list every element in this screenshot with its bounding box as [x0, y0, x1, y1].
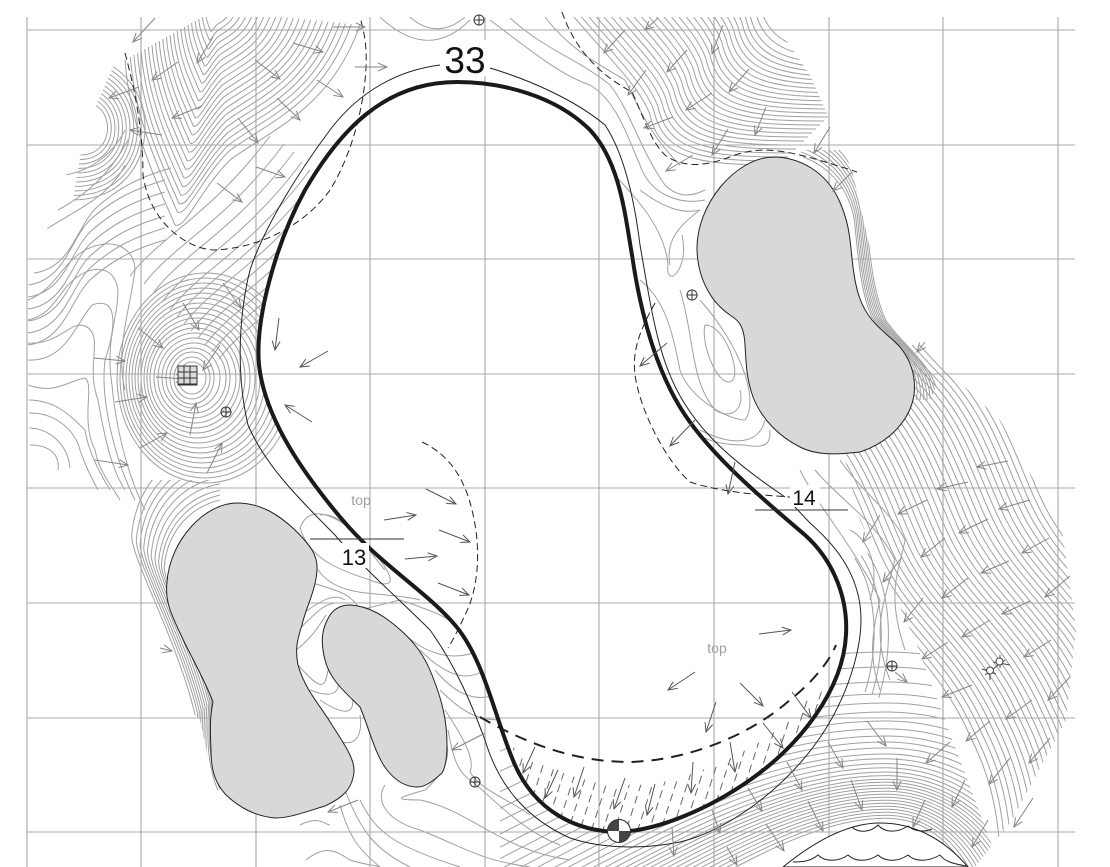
- labels: 33: [444, 40, 486, 81]
- contours: hand-drawn sparse lines: [296, 17, 905, 867]
- contours: diagonal band: [47, 130, 310, 360]
- dark slope arrows on green: [275, 318, 811, 815]
- contours: right slope: [845, 345, 1076, 838]
- contours: band beside green: [855, 553, 888, 698]
- bunker: bottom left: [167, 503, 354, 818]
- bunker: top right: [697, 157, 914, 454]
- survey markers: [221, 15, 897, 787]
- contours: hatching around top-right bunker: [800, 150, 936, 400]
- contours: hatching around bottom-left bunker: [131, 480, 220, 790]
- section lines: [310, 510, 848, 539]
- thick green outline: [258, 82, 846, 832]
- labels: 13: [342, 545, 366, 570]
- drain symbol: [608, 820, 630, 842]
- dashed contour lines: [125, 12, 857, 648]
- thick dashed slope line: [480, 645, 836, 762]
- thin outline: collar: [240, 65, 861, 847]
- pond wave marks: [793, 825, 966, 866]
- hatching: slope zone in lower green: [512, 692, 822, 829]
- labels: top: [707, 640, 727, 656]
- tree symbol: [982, 655, 1010, 680]
- contours: arcs above the pond and under the green: [500, 652, 992, 867]
- contours: top-left slope: [125, 12, 360, 225]
- green interior fill: [258, 82, 846, 832]
- grid symbol: high point: [178, 366, 197, 385]
- contours: rings around high point: [117, 273, 295, 483]
- labels: 14: [792, 487, 816, 510]
- contours: top-right slope: [574, 17, 828, 165]
- labels: [339, 40, 820, 656]
- contours: top-left arcs: [73, 56, 145, 200]
- bunker: small lower: [322, 605, 447, 787]
- pond: [783, 823, 968, 867]
- contours: left wavy lines: [28, 168, 171, 510]
- labels: top: [351, 492, 371, 508]
